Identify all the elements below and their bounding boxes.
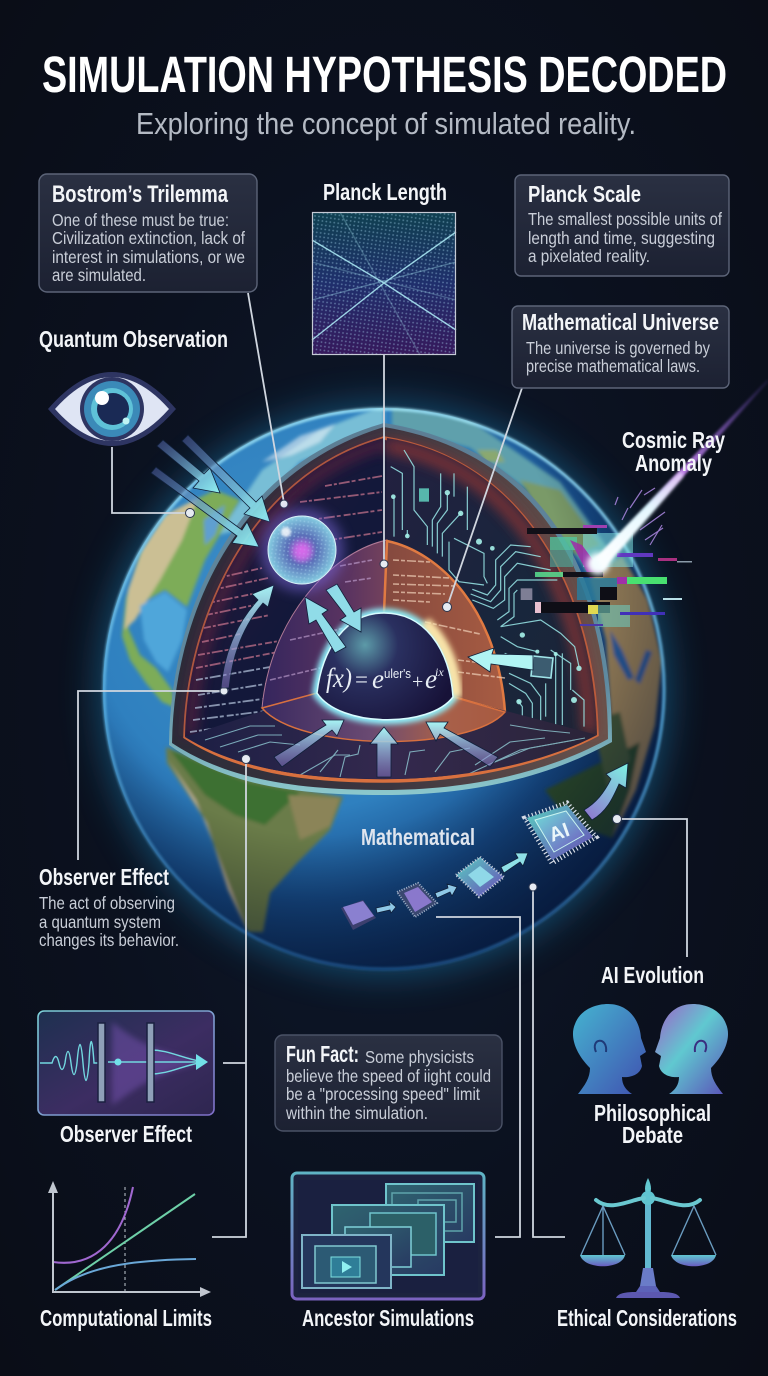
circuit traces [391, 450, 584, 727]
callout: Planck Scale: length and time, suggesting [528, 228, 715, 248]
heading: Planck Length: Planck Length [323, 179, 447, 205]
callout: Bostrom's Trilemma [39, 174, 257, 292]
callout: Fun Fact: believe the speed of iight could [286, 1066, 491, 1086]
icon: eye [48, 372, 176, 446]
callout: Planck Scale [515, 175, 729, 276]
chip AI [525, 803, 596, 863]
right wall [384, 438, 597, 735]
callout: Fun Fact: be a "processing speed" limit [286, 1084, 480, 1104]
chip 3 [456, 857, 504, 897]
arrow: core to orb [305, 597, 346, 653]
equation: + [412, 671, 423, 693]
floor [185, 693, 597, 779]
equation: = [355, 667, 368, 692]
atmosphere glow [98, 403, 670, 975]
arrow: curved observer to orb [221, 585, 274, 688]
text block: Observer Effect: a quantum system [39, 912, 161, 932]
cutaway shell [169, 423, 612, 795]
arrow: AI growth [584, 763, 628, 820]
ring text left [270, 560, 372, 680]
chip 2 [397, 883, 437, 917]
maroon wall edges [185, 438, 597, 737]
arrow: orb to core [326, 584, 361, 632]
ring text right [393, 560, 505, 678]
callout: Bostrom's Trilemma: are simulated. [52, 265, 146, 285]
globe [98, 400, 670, 980]
panel: Ancestor Simulations [292, 1173, 484, 1299]
callout: Planck Scale: The smallest possible units of [528, 209, 722, 229]
code text wall [190, 476, 382, 732]
orange band [185, 438, 597, 781]
shell rim [169, 423, 612, 795]
callout: Fun Fact: Some physicists [365, 1047, 474, 1067]
circuit pads [391, 488, 582, 704]
middle ring right half [384, 541, 505, 712]
equation [326, 663, 444, 694]
panel: Observer Effect wave diagram [38, 1011, 214, 1115]
callout: Fun Fact: Fun Fact: [286, 1041, 359, 1067]
shell band [172, 427, 608, 790]
label: Mathematical: Mathematical [361, 824, 475, 850]
label: Computational Limits: Computational Limits [40, 1305, 212, 1331]
callout: Mathematical Universe: The universe is governed by [526, 338, 710, 358]
arrow: eye to orb top [182, 435, 270, 522]
equation: fx) [326, 663, 352, 693]
equation: e [425, 664, 437, 694]
connector lines [78, 293, 687, 1237]
globe edge highlight [104, 409, 664, 969]
callout: Mathematical Universe: Mathematical Universe [522, 309, 719, 335]
glitch strips [527, 525, 692, 627]
text block: Observer Effect: The act of observing [39, 893, 175, 913]
callout: Bostrom's Trilemma: interest in simulations, or we [52, 247, 245, 267]
floor circuits [205, 725, 585, 778]
microchip on right wall [531, 656, 553, 678]
connector dots [186, 500, 622, 891]
globe body [100, 400, 670, 980]
arrow: eye to surface [157, 440, 220, 493]
icon: scales [580, 1178, 716, 1298]
label: Philosophical Debate: Philosophical [594, 1100, 711, 1126]
arrow: floor right [426, 722, 498, 767]
text block: Observer Effect [39, 864, 179, 950]
callout: Planck Scale: a pixelated reality. [528, 246, 650, 266]
callout: Fun Fact [275, 1035, 502, 1131]
callout: Bostrom's Trilemma: One of these must be true: [52, 210, 229, 230]
frame back [386, 1184, 474, 1242]
equation: e [372, 664, 384, 694]
text block: Observer Effect: changes its behavior. [39, 930, 179, 950]
arrow: chip step 1 [376, 901, 396, 913]
quantum orb [260, 508, 344, 592]
cosmic ray beam [592, 379, 768, 570]
arrow: eye to orb left [151, 467, 259, 547]
label: Cosmic Ray Anomaly: Anomaly [635, 450, 712, 476]
heading: Quantum Observation: Quantum Observation [39, 326, 228, 352]
callout: Mathematical Universe: precise mathematical laws. [526, 356, 700, 376]
chips: AI evolution [341, 803, 596, 930]
subtitle: Exploring the concept of simulated reality. [136, 106, 636, 141]
label: Cosmic Ray Anomaly [622, 427, 725, 476]
chip AI: AI [546, 819, 573, 847]
floor ring [262, 693, 505, 742]
cosmic ray and glitch [527, 379, 768, 627]
panel: Planck grid [312, 212, 456, 355]
chart: computational limits [48, 1181, 211, 1297]
label: Philosophical Debate [594, 1100, 711, 1148]
arrows [151, 435, 628, 913]
arrow: floor middle [370, 727, 398, 777]
callout: Mathematical Universe [512, 306, 729, 388]
arrow: floor left [274, 720, 344, 767]
callout: Planck Scale: Planck Scale [528, 181, 641, 207]
arrow: chip to core [468, 648, 533, 672]
frame small [345, 1227, 411, 1267]
chip 1 [341, 900, 376, 930]
label: Cosmic Ray Anomaly: Cosmic Ray [622, 427, 725, 453]
left wall [185, 438, 384, 737]
callout: Fun Fact: within the simulation. [285, 1103, 428, 1123]
core glow [317, 613, 453, 720]
label: Ancestor Simulations: Ancestor Simulations [302, 1305, 474, 1331]
callout: Bostrom's Trilemma: Civilization extinction, lack of [52, 228, 245, 248]
arrow: chip step 2 [435, 884, 457, 898]
equation: ix [435, 665, 444, 679]
left head [573, 1004, 646, 1094]
label: Observer Effect: Observer Effect [60, 1121, 192, 1147]
middle ring left half [262, 540, 387, 708]
equation: uler's [384, 666, 411, 681]
core sphere [317, 613, 453, 720]
arrow: chip step 3 [501, 853, 528, 873]
text block: Observer Effect: Observer Effect [39, 864, 169, 890]
frame middle [332, 1205, 444, 1275]
label: AI Evolution: AI Evolution [601, 962, 704, 988]
icon: debating heads [573, 1004, 728, 1094]
callout: Bostrom's Trilemma: Bostrom’s Trilemma [52, 181, 228, 208]
right head [655, 1004, 728, 1094]
frame front [302, 1235, 391, 1288]
label: Philosophical Debate: Debate [622, 1122, 683, 1148]
